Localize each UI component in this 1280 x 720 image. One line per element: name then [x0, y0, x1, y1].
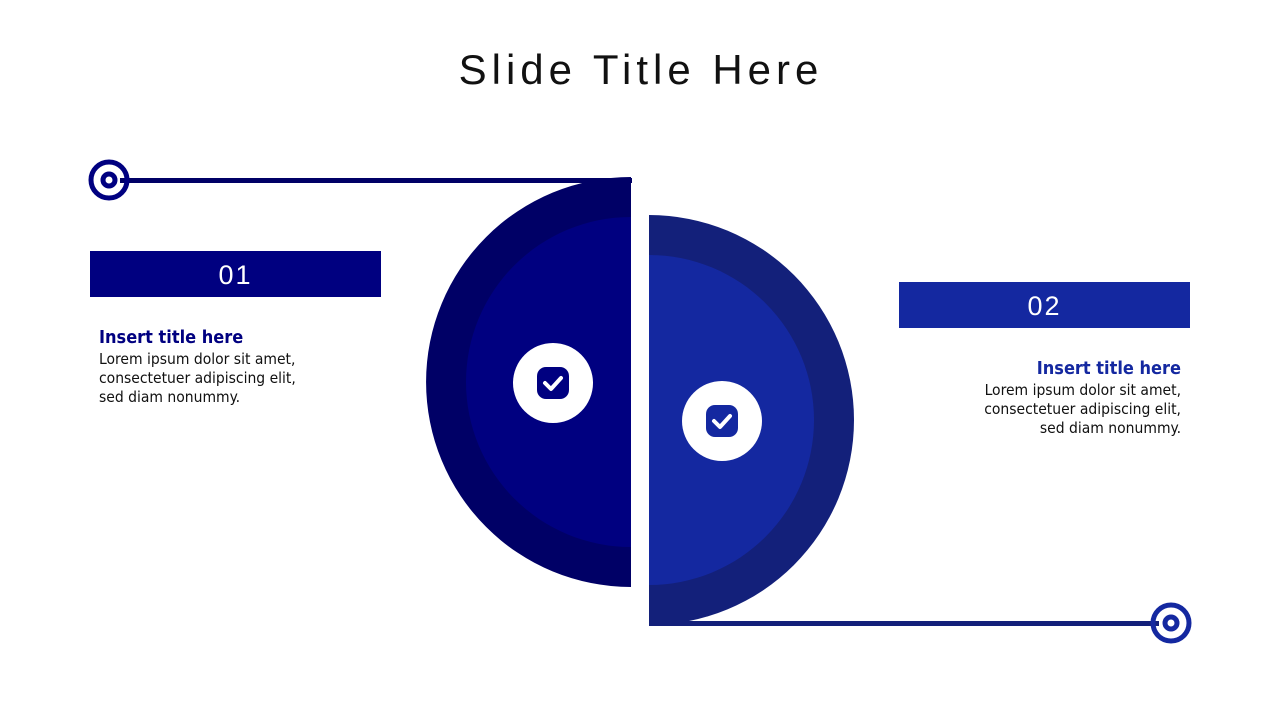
text block 01: consectetuer adipiscing elit,	[99, 369, 296, 387]
text block 01	[99, 327, 296, 406]
label box 01: 01	[218, 260, 253, 290]
half circle left	[426, 177, 631, 587]
text block 01: Insert title here	[99, 327, 243, 348]
text block 02	[984, 358, 1181, 437]
connector line top	[120, 178, 632, 183]
text block 01: sed diam nonummy.	[99, 388, 240, 406]
half circle right	[649, 215, 854, 625]
target icon top-left	[91, 162, 127, 198]
target icon bottom-right	[1153, 605, 1189, 641]
label box 02	[899, 282, 1190, 328]
icon: check left	[513, 343, 593, 423]
text block 02: Insert title here	[1037, 358, 1181, 379]
text block 02: sed diam nonummy.	[1040, 419, 1181, 437]
text block 02: consectetuer adipiscing elit,	[984, 400, 1181, 418]
icon: check right	[682, 381, 762, 461]
label box 01	[90, 251, 381, 297]
title: Slide Title Here	[459, 46, 823, 93]
text block 02: Lorem ipsum dolor sit amet,	[985, 381, 1181, 399]
text block 01: Lorem ipsum dolor sit amet,	[99, 350, 295, 368]
connector line bottom	[649, 621, 1159, 626]
label box 02: 02	[1027, 291, 1062, 321]
